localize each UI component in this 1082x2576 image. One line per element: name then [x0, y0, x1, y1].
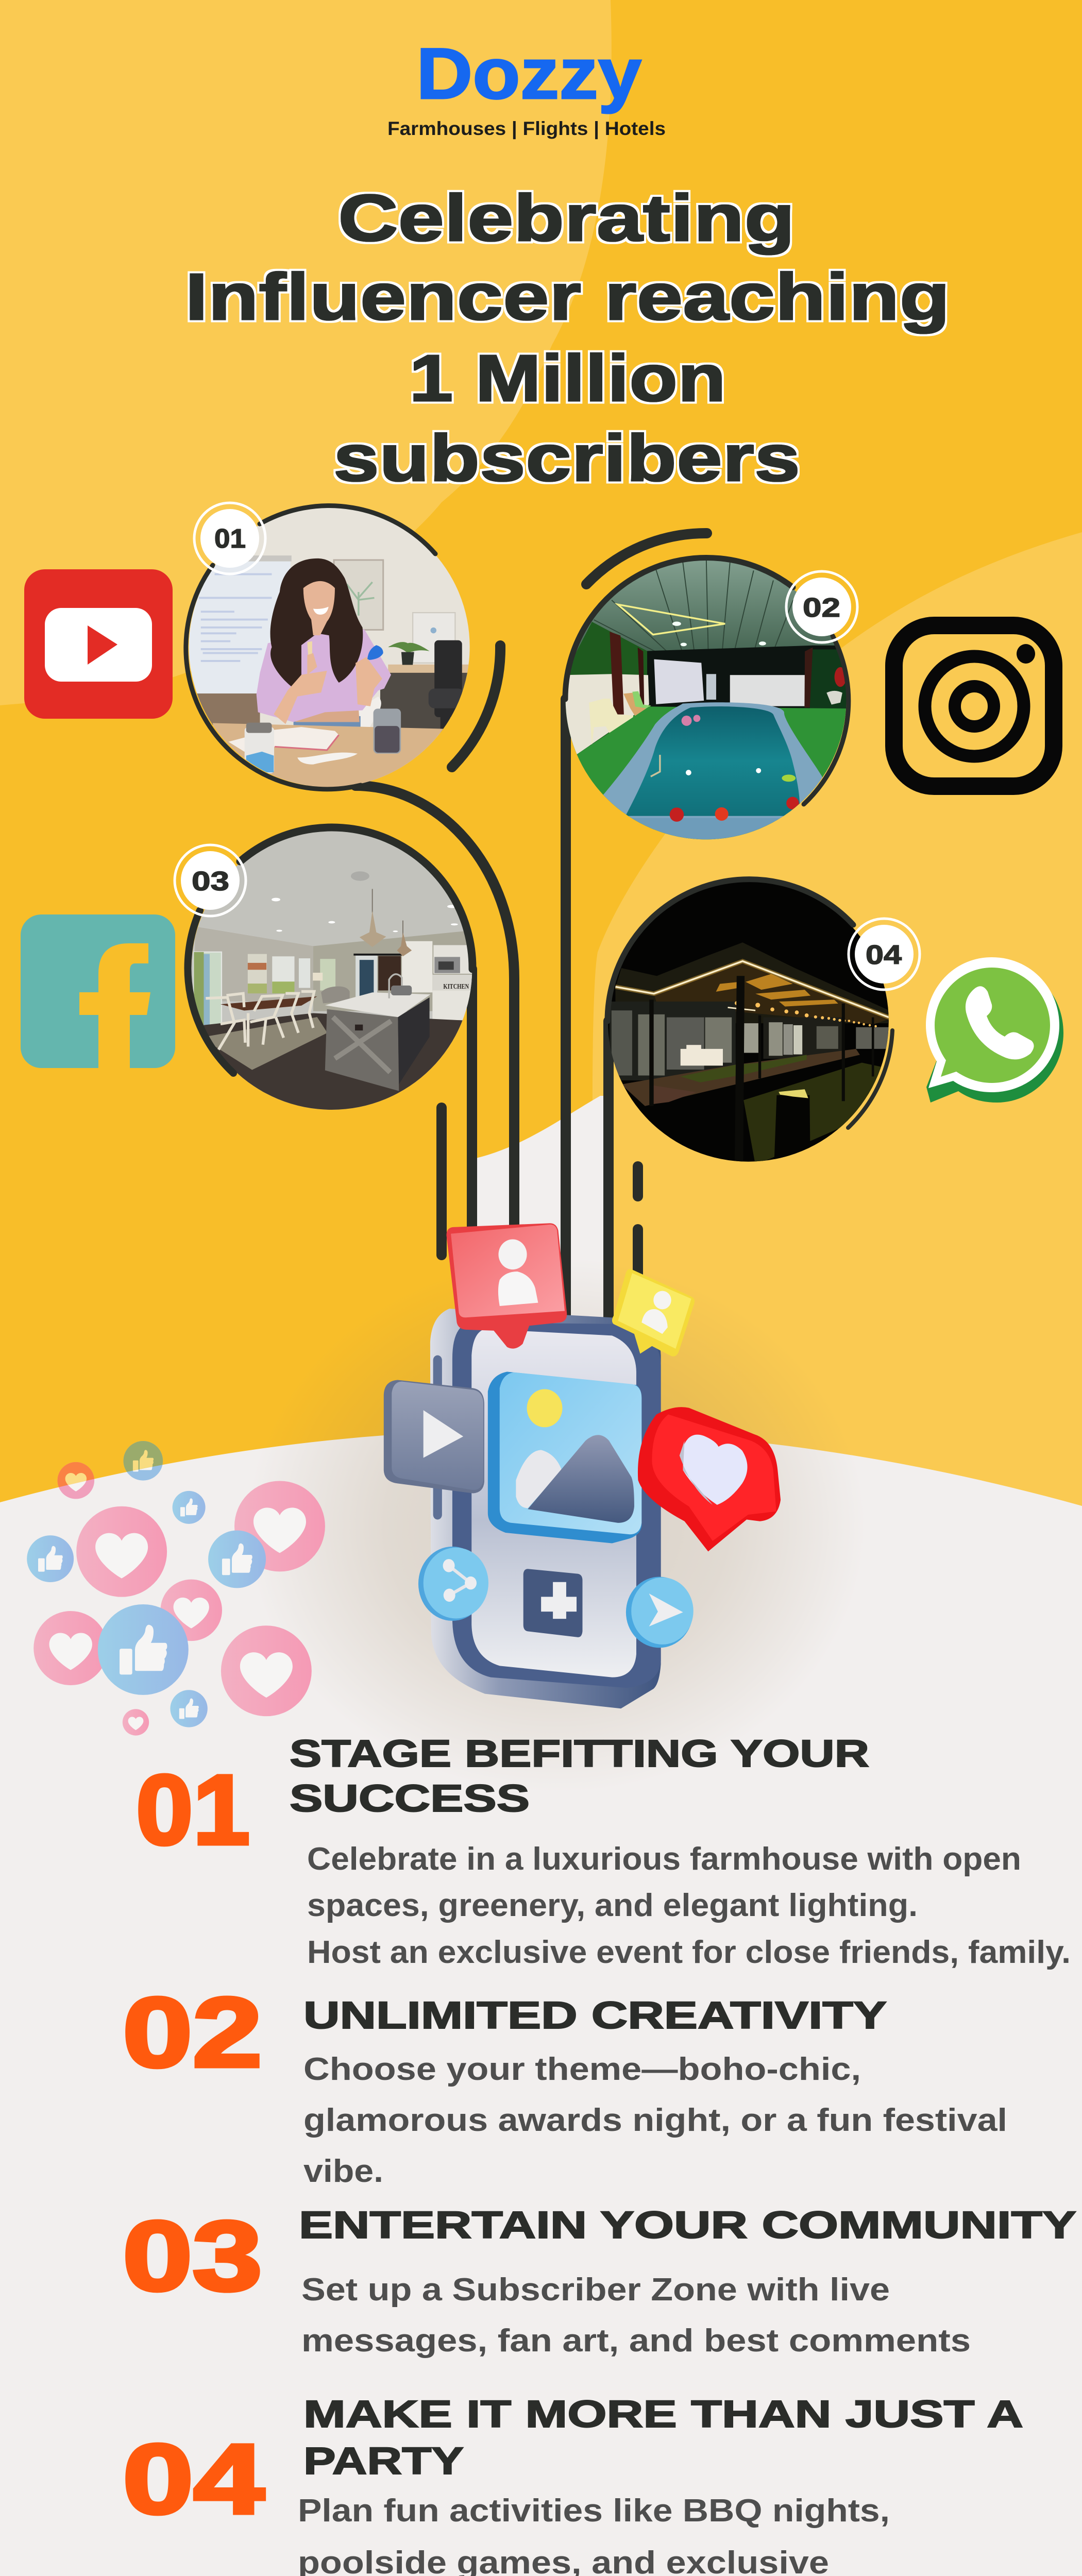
heading 04: MAKE IT MORE THAN JUST A	[303, 2393, 1023, 2435]
icon: red follower bubble	[446, 1223, 567, 1349]
badge 04: 04	[866, 940, 902, 970]
heading 01	[290, 1732, 869, 1820]
kitchen wall sign: KITCHEN	[443, 982, 469, 990]
badge 03	[175, 845, 246, 916]
pink heart bubble	[234, 1481, 325, 1571]
translucent heart bubble on hill edge	[58, 1462, 94, 1499]
title: 1 Million	[409, 342, 726, 415]
pink heart bubble	[76, 1506, 167, 1597]
number 04: 04	[123, 2424, 264, 2534]
body 04	[298, 2493, 890, 2576]
logo: Dozzy	[387, 33, 666, 140]
title	[185, 181, 950, 495]
body 04: Plan fun activities like BBQ nights,	[298, 2493, 890, 2529]
badge 01	[194, 503, 265, 574]
pink heart bubble	[160, 1580, 222, 1641]
blue thumb bubble	[173, 1491, 206, 1524]
heading 04	[303, 2393, 1023, 2482]
translucent bubbles tinted above hill	[58, 1441, 163, 1499]
icon: share circle	[418, 1547, 488, 1621]
like and heart bubbles cluster	[27, 1441, 325, 1736]
icon: WhatsApp	[926, 957, 1063, 1103]
badge 02	[786, 571, 857, 642]
phone illustration	[384, 1223, 781, 1708]
number 02: 02	[123, 1977, 262, 2088]
blue thumb bubble	[170, 1690, 208, 1727]
phone frame	[452, 1323, 661, 1688]
photo 04 outline arcs	[607, 879, 892, 1128]
badge 02: 02	[803, 593, 840, 623]
icon: Instagram	[894, 625, 1054, 786]
body 01: Host an exclusive event for close friends, family.	[307, 1935, 1071, 1970]
pink heart bubble	[221, 1625, 312, 1716]
badge 01: 01	[214, 524, 246, 554]
phone screen	[471, 1329, 636, 1677]
body 02	[303, 2052, 1007, 2189]
icon: plus button	[523, 1569, 582, 1637]
logo wordmark: Dozzy	[416, 33, 641, 114]
badge 04	[849, 919, 920, 990]
body 03: messages, fan art, and best comments	[301, 2323, 971, 2359]
heading 01: STAGE BEFITTING YOUR	[290, 1732, 869, 1775]
blue thumb bubble, large	[98, 1604, 189, 1695]
badge 03: 03	[192, 867, 229, 896]
body 02: glamorous awards night, or a fun festival	[303, 2103, 1007, 2138]
body 01: Celebrate in a luxurious farmhouse with open	[307, 1841, 1021, 1877]
section 02	[123, 1977, 1007, 2189]
title: Influencer reaching	[185, 260, 950, 334]
icon: picture card	[488, 1372, 641, 1543]
photo 01: woman presenting	[189, 508, 470, 787]
section 03	[123, 2200, 1076, 2359]
blue thumb bubble	[27, 1535, 74, 1582]
icon: YouTube	[24, 569, 173, 719]
icon: send circle	[626, 1577, 694, 1648]
section 04	[123, 2393, 1023, 2576]
heading 04: PARTY	[303, 2439, 464, 2482]
body 03: Set up a Subscriber Zone with live	[301, 2272, 890, 2308]
body 01: spaces, greenery, and elegant lighting.	[307, 1888, 918, 1923]
blue thumb bubble	[208, 1530, 266, 1588]
photo 03: kitchen	[192, 832, 472, 1110]
body 03	[301, 2272, 971, 2359]
heading 01: SUCCESS	[290, 1777, 530, 1820]
heading 03: ENTERTAIN YOUR COMMUNITY	[299, 2204, 1076, 2246]
background: light yellow right shape	[593, 532, 1082, 1546]
photo 01 outline arcs	[186, 506, 435, 789]
icon: yellow follower bubble	[612, 1269, 695, 1357]
body 02: vibe.	[303, 2154, 383, 2189]
small pink heart bubble	[123, 1709, 149, 1736]
background: light yellow top-left shape	[0, 0, 612, 705]
photo 03 outline arcs	[188, 827, 472, 1073]
number 01: 01	[136, 1754, 250, 1865]
photo 04: night lounge	[608, 882, 889, 1162]
title: Celebrating	[338, 181, 795, 255]
heading 02: UNLIMITED CREATIVITY	[303, 1994, 887, 2037]
icon: Facebook	[21, 914, 175, 1068]
title: subscribers	[333, 421, 800, 495]
photo 02 outline arcs	[565, 557, 849, 804]
body 02: Choose your theme—boho-chic,	[303, 2052, 861, 2087]
logo tagline: Farmhouses | Flights | Hotels	[387, 118, 666, 140]
pink heart bubble	[33, 1611, 108, 1685]
phone body	[430, 1309, 661, 1708]
background: white wedge behind lines	[471, 1096, 607, 1468]
background: off-white hill and lower section	[0, 1430, 1082, 2576]
photo 02: indoor pool	[566, 561, 846, 840]
section 01	[136, 1732, 1071, 1970]
soft shadow behind phone	[247, 1257, 866, 1793]
number 03: 03	[123, 2200, 262, 2311]
icon: red heart bubble	[638, 1407, 781, 1551]
icon: play card	[384, 1380, 484, 1494]
connector lines from photos to phone	[356, 533, 707, 1319]
body 01	[307, 1841, 1071, 1970]
translucent thumb bubble on hill edge	[123, 1441, 163, 1481]
